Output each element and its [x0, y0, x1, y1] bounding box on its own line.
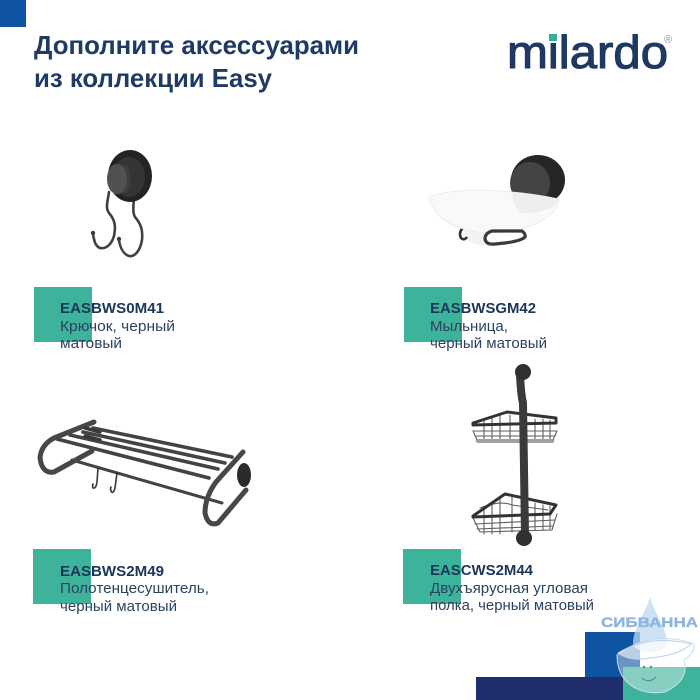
label: EASCWS2M44: полка, черный матовый	[430, 598, 594, 614]
teal square: corner shelf	[403, 549, 461, 604]
title	[34, 30, 359, 93]
icon: towel rack	[40, 422, 251, 524]
teal square: soap dish	[404, 287, 462, 342]
title: из коллекции Easy	[34, 63, 273, 93]
watermark: СИБВАННА: СИБВАННА	[601, 614, 698, 630]
corner square	[0, 0, 26, 27]
label: EASBWS0M41: Крючок, черный	[60, 319, 175, 335]
label: EASBWS0M41: матовый	[60, 336, 122, 352]
teal square: towel rack	[33, 549, 91, 604]
label: EASBWS2M49	[60, 564, 209, 615]
logo: milardo: ®	[664, 34, 672, 46]
label: EASBWSGM42: черный матовый	[430, 336, 547, 352]
corner blocks	[476, 632, 700, 700]
label: EASBWSGM42: Мыльница,	[430, 319, 508, 335]
label: EASBWS2M49: Полотенцесушитель,	[60, 581, 209, 597]
label: EASBWSGM42	[430, 301, 547, 352]
label: EASCWS2M44: EASCWS2M44	[430, 563, 533, 579]
label: EASBWS2M49: EASBWS2M49	[60, 564, 164, 580]
label: EASCWS2M44	[430, 563, 594, 614]
label: EASBWS2M49: черный матовый	[60, 599, 177, 615]
teal square: hook	[34, 287, 92, 342]
label: EASBWS0M41	[60, 301, 175, 352]
icon: two-tier corner shelf	[473, 364, 557, 546]
watermark: СИБВАННА	[601, 597, 698, 693]
icon: double hook	[91, 150, 152, 256]
icon: soap dish	[429, 155, 565, 246]
logo: milardo: milardo	[507, 26, 668, 78]
label: EASCWS2M44: Двухъярусная угловая	[430, 581, 588, 597]
label: EASBWSGM42: EASBWSGM42	[430, 301, 536, 317]
label: EASBWS0M41: EASBWS0M41	[60, 301, 164, 317]
title: Дополните аксессуарами	[34, 30, 359, 60]
